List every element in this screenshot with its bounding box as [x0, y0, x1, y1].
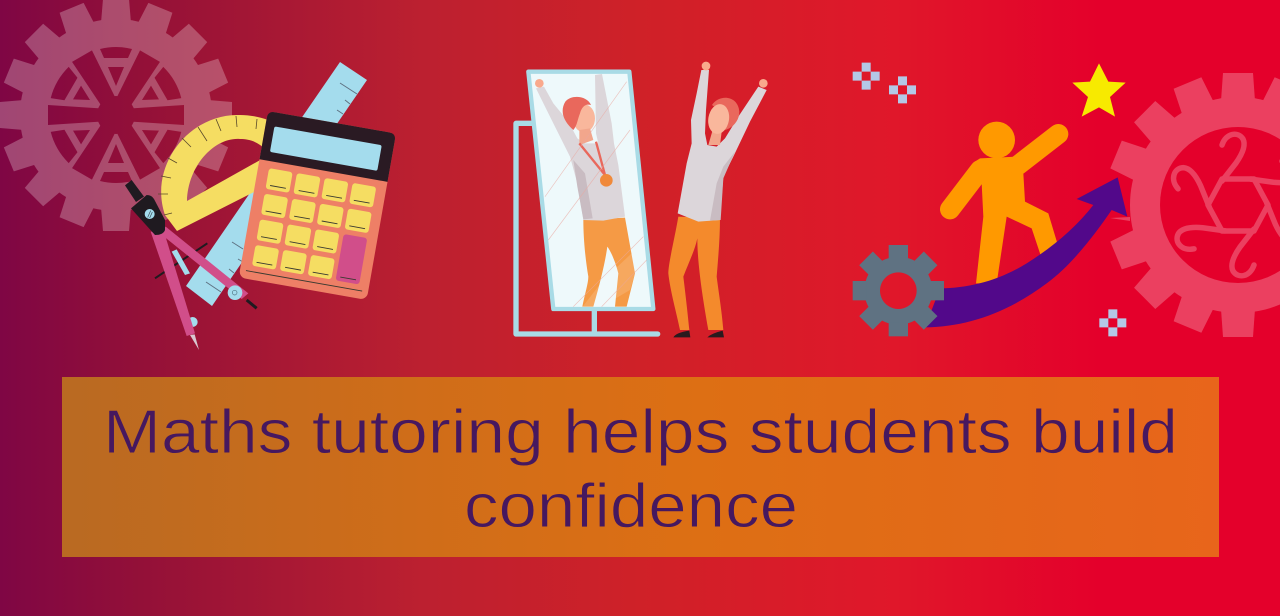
mirror reflection figure: [535, 74, 647, 307]
person: [950, 122, 1058, 283]
star: [1072, 63, 1126, 117]
protractor: [158, 115, 268, 231]
decorative gear: left: [0, 0, 233, 232]
illustration: climbing figure: [853, 63, 1127, 336]
mirror stand: [516, 123, 658, 334]
heading: [103, 398, 1178, 541]
mirror: [528, 72, 653, 309]
decorative gear: right: [1106, 72, 1280, 338]
heading: Maths tutoring helps students build: [103, 398, 1178, 467]
compass: [125, 180, 257, 350]
gear icon: [853, 245, 944, 336]
illustration: maths tools: [125, 62, 396, 350]
banner: [62, 377, 1219, 557]
heading: confidence: [464, 472, 798, 541]
banner panel: [62, 377, 1219, 557]
pixel sparkles: [853, 63, 1126, 336]
growth arrow: [925, 177, 1127, 327]
man: [668, 62, 768, 337]
calculator: [239, 111, 396, 300]
illustration: man with mirror: [516, 62, 768, 337]
ruler: [186, 62, 367, 306]
